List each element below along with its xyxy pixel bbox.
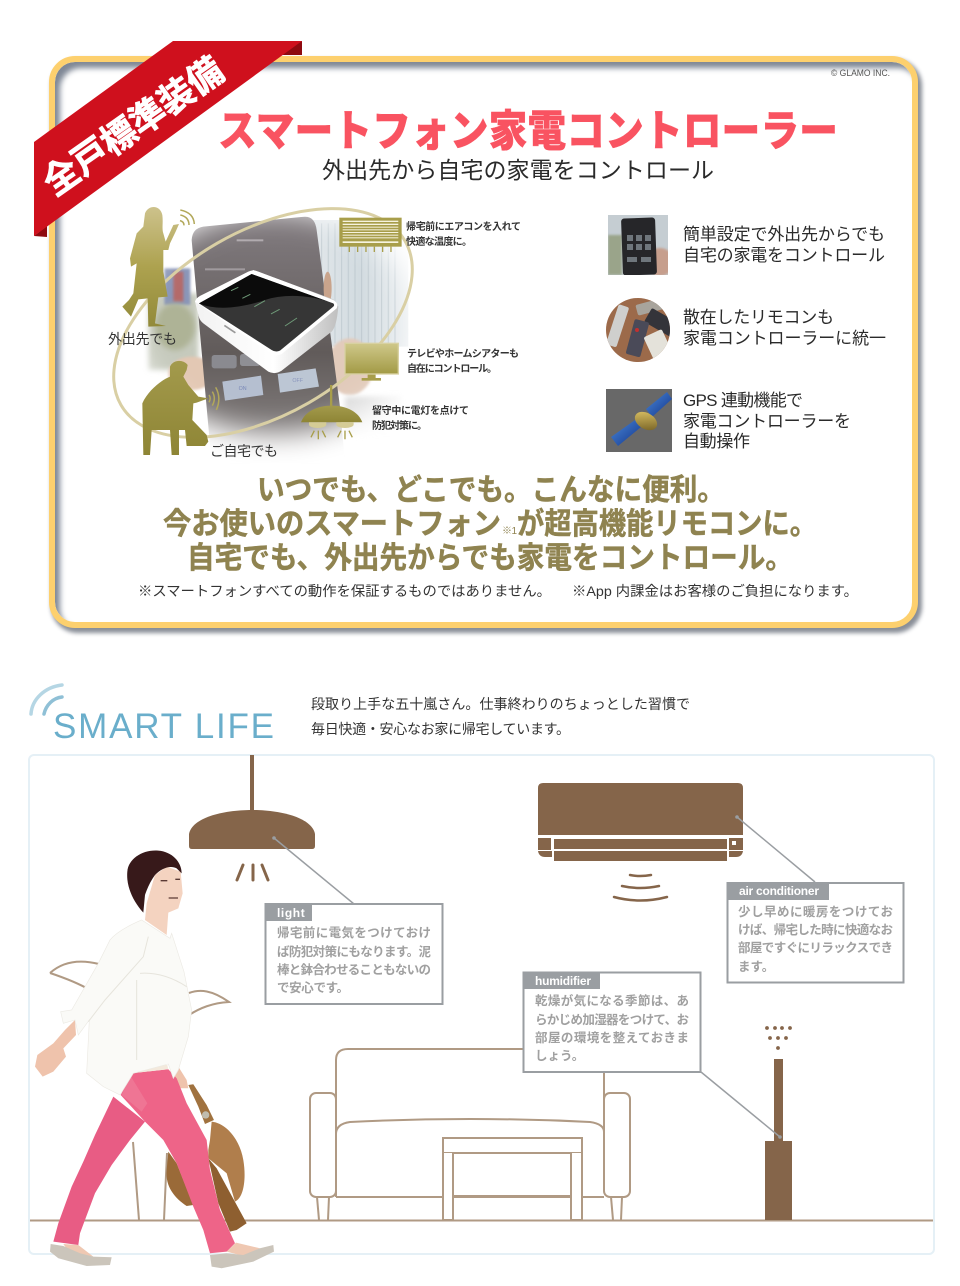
floor <box>30 1220 933 1222</box>
icon: air conditioner <box>339 218 402 252</box>
callout: light: light <box>277 906 305 920</box>
callout: light: で安心です。 <box>277 980 349 995</box>
photo: scattered remote controls <box>606 298 670 362</box>
callout: air conditioner: 少し早めに暖房をつけてお <box>738 904 893 919</box>
ribbon: standard equipment: 全戸標準装備 <box>36 49 231 203</box>
callout: air conditioner <box>727 815 904 982</box>
callout: air conditioner: air conditioner <box>739 884 819 898</box>
blouse <box>61 920 192 1095</box>
callout: light: 帰宅前に電気をつけておけ <box>277 925 431 940</box>
intro text: 段取り上手な五十嵐さん。仕事終わりのちょっとした習慣で <box>311 696 690 712</box>
callout: humidifier: humidifier <box>535 974 591 988</box>
tagline <box>163 474 817 575</box>
caption: lamp: 防犯対策に。 <box>372 419 427 432</box>
feature: easy setup: 簡単設定で外出先からでも <box>683 225 885 244</box>
intro text: 毎日快適・安心なお家に帰宅しています。 <box>311 721 570 737</box>
icon: air conditioner <box>538 783 743 900</box>
footnote: ※スマートフォンすべての動作を保証するものではありません。 <box>138 583 551 599</box>
footnote: ※App 内課金はお客様のご負担になります。 <box>572 583 858 599</box>
shoes <box>50 1243 274 1268</box>
tagline: いつでも、どこでも。こんなに便利。 <box>257 474 725 507</box>
panel: smartphone appliance controller <box>34 41 925 636</box>
feature: unified remotes: 散在したリモコンも <box>683 308 834 327</box>
callout: air conditioner: 部屋ですぐにリラックスでき <box>738 940 893 955</box>
scene frame <box>29 755 934 1254</box>
eyes and mouth <box>161 879 180 898</box>
label: away: 外出先でも <box>108 331 177 347</box>
furniture: plant <box>50 962 229 1220</box>
furniture: sofa <box>310 1049 630 1220</box>
feature: easy setup <box>608 215 885 276</box>
feature: easy setup: 自宅の家電をコントロール <box>683 246 885 265</box>
tagline: 自宅でも、外出先からでも家電をコントロール。 <box>187 542 793 575</box>
photo: walking woman <box>35 851 274 1268</box>
device <box>195 270 338 373</box>
feature: unified remotes <box>606 295 886 362</box>
icon: ceiling lamp <box>301 385 362 439</box>
hair <box>127 851 182 913</box>
bag <box>166 1084 247 1232</box>
photo: smartphone in hand <box>608 215 668 275</box>
callout: humidifier <box>523 972 782 1139</box>
neck and face <box>145 867 183 935</box>
caption: air conditioner: 帰宅前にエアコンを入れて <box>406 220 521 233</box>
intro text <box>311 696 690 737</box>
lace hem <box>132 1065 168 1073</box>
footnote <box>138 583 858 599</box>
ring <box>75 161 451 485</box>
icon: woman silhouette <box>122 207 194 327</box>
feature: GPS linkage: 家電コントローラーを <box>683 412 851 431</box>
icon: seated man silhouette <box>142 361 219 455</box>
feature: unified remotes: 家電コントローラーに統一 <box>683 329 886 348</box>
caption: television <box>407 347 519 375</box>
logo: smart life <box>31 685 274 746</box>
callout: air conditioner: ます。 <box>738 960 774 974</box>
callout: humidifier: しょう。 <box>535 1049 584 1063</box>
logo: smart life: SMART LIFE <box>53 707 274 746</box>
arm and hand <box>35 1020 188 1088</box>
photo background <box>148 217 408 463</box>
icon: ceiling light <box>189 755 315 880</box>
ribbon: standard equipment <box>34 41 302 237</box>
front leg <box>121 1069 235 1253</box>
callout: humidifier: 部屋の環境を整えておきま <box>535 1030 689 1045</box>
caption: air conditioner: 快適な温度に。 <box>406 235 472 248</box>
icon: humidifier <box>765 1026 792 1220</box>
caption: lamp <box>372 404 469 432</box>
furniture: table <box>443 1138 582 1220</box>
caption: air conditioner <box>406 220 521 248</box>
caption: television: テレビやホームシアターも <box>407 347 519 360</box>
back leg <box>53 1097 145 1245</box>
title: スマートフォン家電コントローラー <box>218 108 838 156</box>
photo: satellite <box>606 389 672 452</box>
feature: GPS linkage <box>606 389 851 452</box>
callout: light: 棒と鉢合わせることもないの <box>277 962 431 977</box>
tagline: ※1 <box>502 526 517 537</box>
tagline: が超高機能リモコンに。 <box>517 507 817 541</box>
photo background: OFF <box>292 378 304 384</box>
icon: television <box>345 343 398 381</box>
callout: air conditioner: けば、帰宅した時に快適なお <box>738 922 893 937</box>
caption: lamp: 留守中に電灯を点けて <box>372 404 469 417</box>
illustration: smartphone and home appliances <box>108 207 520 458</box>
feature: GPS linkage: GPS 連動機能で <box>683 391 803 410</box>
callout: humidifier: 乾燥が気になる季節は、あ <box>535 993 689 1008</box>
tagline: 今お使いのスマートフォン <box>163 508 501 541</box>
callout: light <box>265 836 442 1004</box>
subtitle: 外出先から自宅の家電をコントロール <box>322 157 714 183</box>
label: at home: ご自宅でも <box>210 443 278 459</box>
feature: GPS linkage: 自動操作 <box>683 432 750 451</box>
caption: television: 自在にコントロール。 <box>407 362 497 375</box>
callout: light: ば防犯対策にもなります。泥 <box>277 944 431 959</box>
callout: humidifier: らかじめ加湿器をつけて、お <box>535 1012 689 1027</box>
copyright: © GLAMO INC. <box>831 68 890 78</box>
photo background: ON <box>239 386 247 392</box>
